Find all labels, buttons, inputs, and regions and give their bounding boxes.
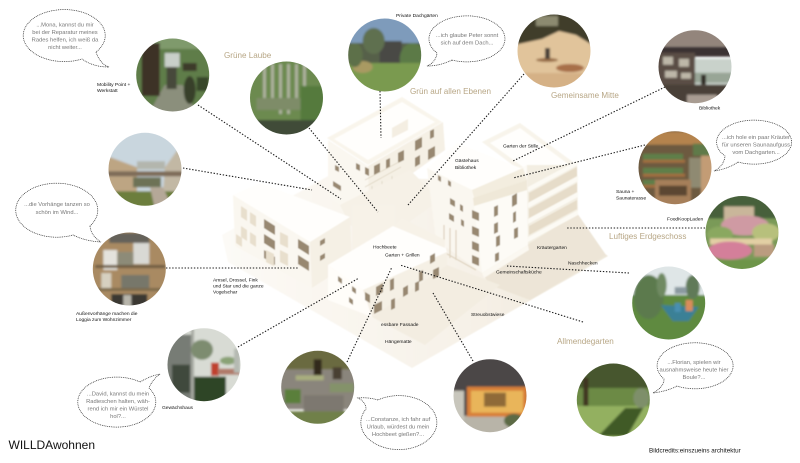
- photo: loggia curtains: [92, 232, 166, 306]
- feature labels: Gemeinschaftsküche: [496, 270, 542, 276]
- building: rear centre: [327, 97, 445, 240]
- speech bubble: David: ...David, kannst du mein: [87, 392, 149, 398]
- speech bubble: David: rend ich mir ein Würstel: [88, 406, 148, 412]
- speech bubble: Peter: ...ich glaube Peter sonnt: [436, 33, 499, 39]
- feature labels: Hochbeete: [373, 244, 397, 250]
- speech bubble: Kräuter: ...ich hole ein paar Kräuter: [722, 135, 790, 141]
- feature labels: Bibliothek: [455, 165, 477, 171]
- feature labels: Sauna +: [616, 189, 635, 195]
- feature labels: Saunaterasse: [616, 196, 646, 202]
- feature labels: Amsel, Drossel, Fink: [213, 278, 258, 284]
- speech bubble: Vorhänge: schön im Wind...: [36, 210, 79, 216]
- photo: sand playground: [518, 14, 590, 88]
- feature labels: Hängematte: [385, 339, 412, 345]
- feature labels: Streuobstwiese: [471, 312, 505, 318]
- speech bubble: Florian: [653, 343, 733, 393]
- feature labels: essbare Fassade: [381, 322, 419, 328]
- isometric building model: [222, 97, 608, 368]
- feature labels: FoodKoopLaden: [667, 216, 703, 222]
- building: right: [427, 123, 578, 278]
- speech bubble: Constanze: Hochbeet gießen?...: [372, 432, 424, 438]
- photo: food coop: [706, 196, 778, 269]
- image credits: Bildcredits:einszueins architektur: [649, 448, 741, 454]
- title: WILLDAwohnen: WILLDAwohnen: [8, 438, 95, 452]
- speech bubble: Peter: [427, 16, 505, 66]
- photo: greenhouse: [168, 328, 240, 402]
- speech bubble: Mona: Rades helfen, ich weiß da: [32, 38, 99, 44]
- speech bubble: David: hol?...: [110, 414, 126, 420]
- heading: Grün auf allen Ebenen: Grün auf allen Ebenen: [410, 87, 491, 96]
- feature labels: und Star und die ganze: [213, 284, 264, 290]
- feature labels: Garten der Stille: [503, 144, 539, 150]
- feature labels: Garten + Grillen: [385, 252, 420, 258]
- feature labels: Loggia zum Wohnzimmer: [76, 317, 132, 323]
- feature labels: Gewächshaus: [162, 405, 194, 411]
- feature labels: Naschhecken: [568, 260, 598, 266]
- photo: herb wall: [638, 131, 712, 204]
- speech bubble: Mona: ...Mona, kannst du mir: [36, 22, 94, 28]
- feature labels: Vogelschar: [213, 290, 238, 296]
- speech bubble: Florian: Boule?...: [683, 375, 706, 381]
- photo: raised beds: [281, 350, 354, 424]
- photo: bridge courtyard: [108, 132, 182, 206]
- photo: roof garden: [348, 18, 422, 92]
- photo: lit house: [454, 359, 526, 432]
- building: left: [233, 183, 395, 288]
- photo: green facade: [250, 62, 323, 134]
- heading: Allmendegarten: Allmendegarten: [557, 337, 614, 346]
- speech bubble: Mona: nicht weiter...: [48, 45, 82, 51]
- photo: library: [658, 30, 732, 104]
- speech bubble: David: [78, 374, 160, 427]
- speech bubble: Mona: bei der Reparatur meines: [32, 30, 98, 36]
- building: front centre: [328, 218, 447, 317]
- speech bubble: Florian: ausnahmsweise heute hier: [660, 368, 729, 374]
- feature labels: Werkstatt: [97, 88, 118, 94]
- heading: Gemeinsame Mitte: Gemeinsame Mitte: [551, 91, 619, 100]
- speech bubble: Vorhänge: [16, 183, 101, 242]
- heading: Luftiges Erdgeschoss: Luftiges Erdgeschoss: [609, 232, 686, 241]
- photo: bikes: [136, 38, 210, 112]
- speech bubble: Kräuter: für unseren Saunaaufguss: [722, 142, 790, 148]
- speech bubble: Peter: sich auf dem Dach...: [441, 40, 494, 46]
- speech bubble: David: Radieschen halten, wäh-: [86, 399, 150, 405]
- heading: Grüne Laube: Grüne Laube: [224, 51, 272, 60]
- speech bubble: Vorhänge: ...die Vorhänge tanzen so: [24, 202, 90, 208]
- speech bubble: Constanze: ...Constanze, ich fahr auf: [366, 417, 431, 423]
- feature labels: Außenvorhänge machen die: [76, 311, 138, 317]
- speech bubble: Constanze: Urlaub, würdest du mein: [367, 424, 429, 430]
- speech bubble: Kräuter: [714, 120, 792, 171]
- photo: hammock: [632, 266, 706, 340]
- speech bubble: Mona: [23, 10, 109, 67]
- feature labels: [76, 13, 721, 411]
- speech bubble: Florian: ...Florian, spielen wir: [667, 360, 721, 366]
- feature labels: Bibliothek: [699, 106, 721, 112]
- photo: orchard meadow: [576, 364, 650, 436]
- speech bubble: Kräuter: vom Dachgarten...: [732, 150, 780, 156]
- feature labels: Kräutergarten: [537, 245, 567, 251]
- ground plane: [222, 175, 608, 368]
- dotted leader lines: [166, 74, 705, 362]
- feature labels: Gästehaus: [455, 158, 479, 164]
- feature labels: Private Dachgärten: [396, 13, 438, 19]
- feature labels: Mobility Point +: [97, 82, 130, 88]
- speech bubble: Constanze: [358, 396, 437, 450]
